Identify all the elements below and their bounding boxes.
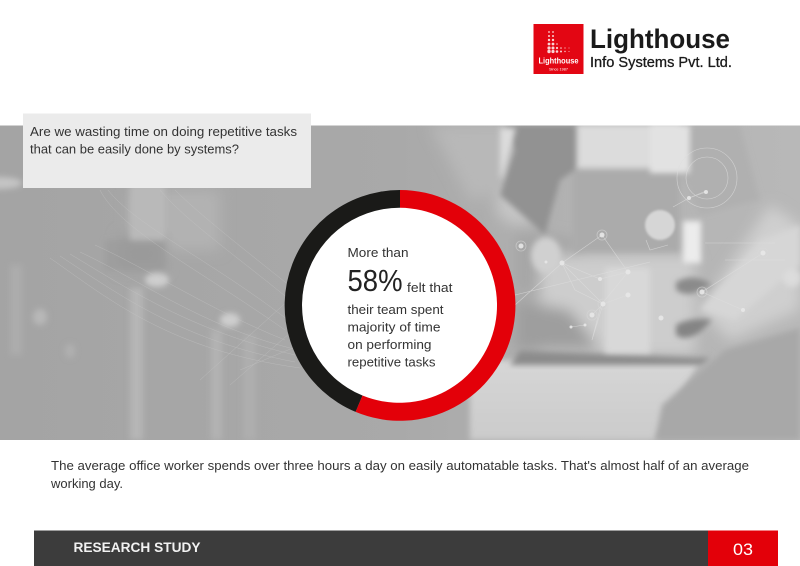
body text: The average office worker spends over three hours a day on easily automatable tasks. That's almost half of an average	[51, 458, 749, 473]
question box	[23, 114, 311, 188]
footer bar	[34, 530, 778, 566]
footer heading: RESEARCH STUDY	[74, 540, 200, 555]
mesh wave lines	[50, 190, 305, 385]
logo mark: red square	[534, 24, 584, 74]
logo	[534, 24, 732, 74]
callout text: repetitive tasks	[348, 354, 436, 370]
ring segment: 58 percent	[356, 190, 515, 421]
logo tagline: Info Systems Pvt. Ltd.	[590, 54, 732, 71]
body text	[50, 458, 749, 491]
callout text: More than	[348, 245, 408, 260]
donut chart: 58 percent callout	[285, 190, 515, 421]
page number	[708, 530, 778, 566]
question box: Are we wasting time on doing repetitive tasks	[30, 124, 297, 139]
logo wordmark: Lighthouse	[590, 24, 730, 54]
network overlay	[515, 148, 748, 340]
table surface	[470, 360, 700, 440]
body text: working day.	[50, 476, 123, 491]
background photo: hands using a tablet with network overlay	[0, 125, 800, 441]
callout text	[348, 245, 453, 370]
callout text: majority of time	[348, 320, 440, 334]
page number: 03	[733, 540, 753, 559]
callout text: 58%	[348, 263, 402, 298]
callout text: their team spent	[348, 302, 444, 317]
question box: that can be easily done by systems?	[30, 142, 239, 156]
callout text: on performing	[348, 337, 432, 352]
ring segment: remainder	[285, 190, 400, 412]
logo mark: red square: Since 1987	[549, 66, 569, 72]
logo mark: red square: Lighthouse	[538, 56, 579, 66]
callout text: felt that	[407, 280, 453, 295]
